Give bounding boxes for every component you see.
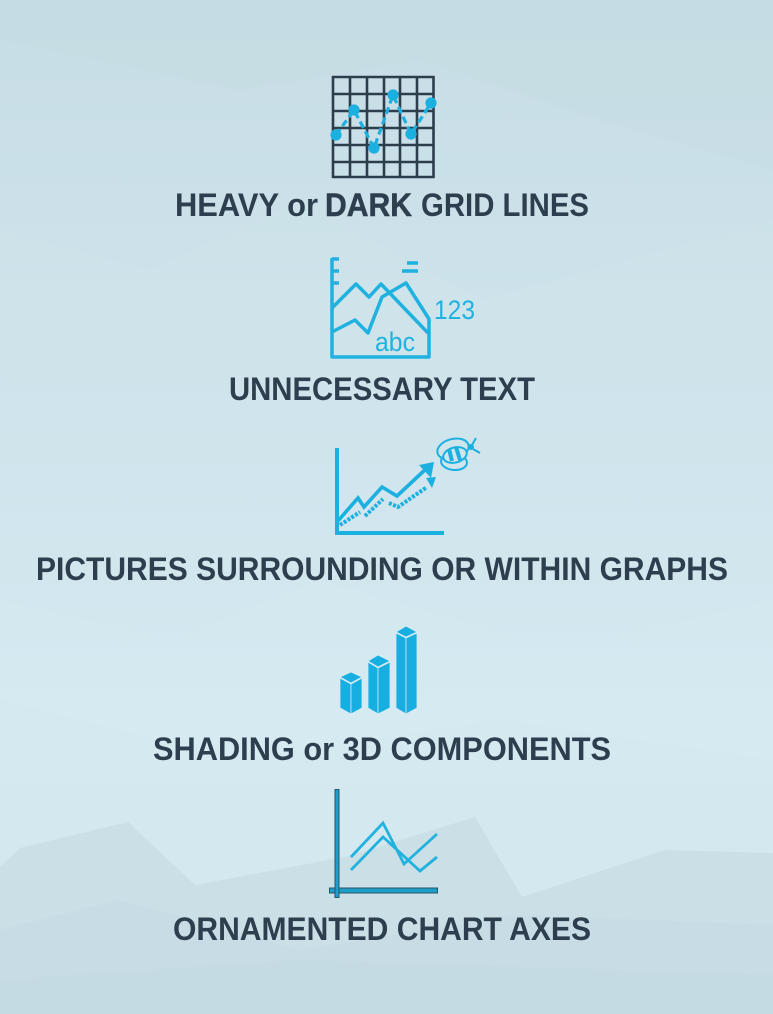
icon: heavy grid with dashed line chart [330, 76, 437, 178]
icon: area chart with unnecessary text [332, 258, 475, 357]
heading: heavy or dark grid lines: DARK [325, 187, 412, 223]
heading: heavy or dark grid lines: HEAVY or [175, 187, 318, 223]
icon: bee [435, 435, 480, 471]
icon: 3D bar chart [340, 626, 417, 714]
icon: ornamented chart axes [330, 790, 438, 898]
heading: ornamented chart axes: ORNAMENTED CHART AXES [173, 911, 591, 947]
heading: heavy or dark grid lines [175, 187, 589, 223]
heading: shading or 3D components: SHADING or 3D COMPONENTS [153, 731, 611, 767]
icon: line chart with bee picture [337, 435, 480, 533]
heading: pictures surrounding or within graphs: PICTURES SURROUNDING OR WITHIN GRAPHS [36, 551, 728, 587]
heading: heavy or dark grid lines: GRID LINES [421, 187, 589, 223]
icon: area chart with unnecessary text: abc [375, 327, 415, 357]
heading: unnecessary text: UNNECESSARY TEXT [229, 371, 535, 407]
icon: area chart with unnecessary text: 123 [434, 295, 475, 325]
